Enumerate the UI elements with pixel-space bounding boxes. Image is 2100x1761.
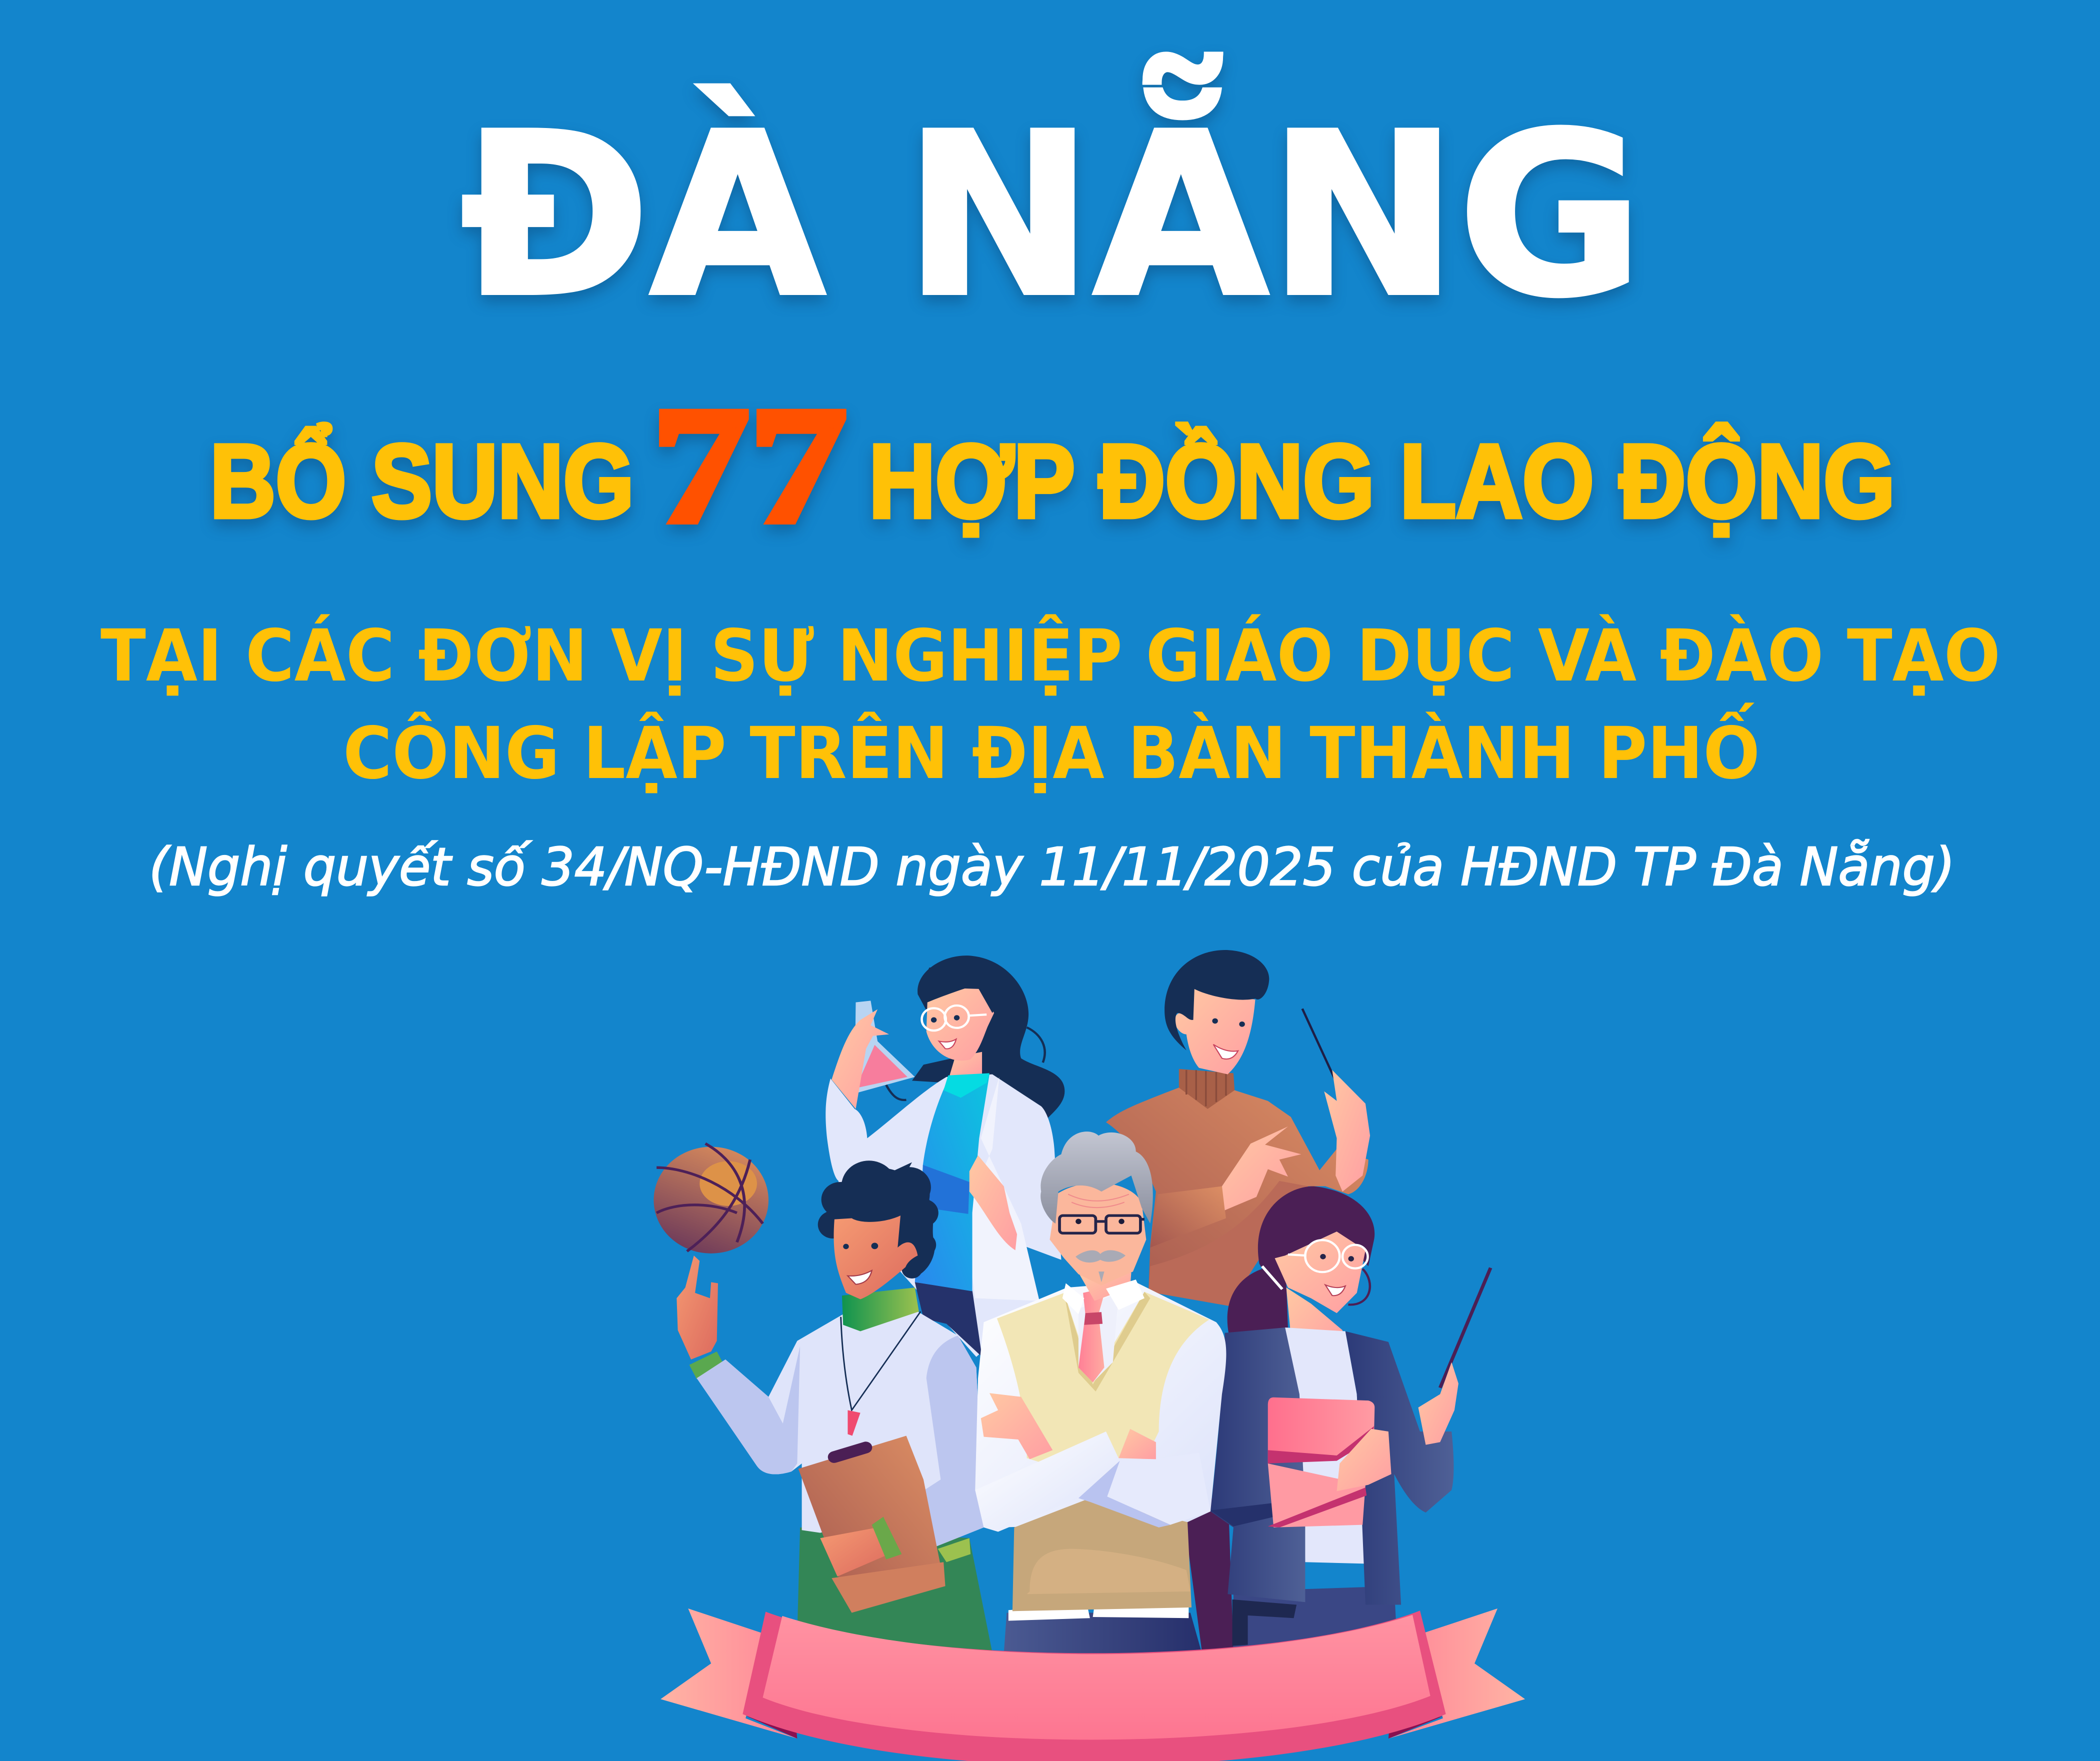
illustration: group of teachers <box>654 950 1525 1761</box>
ribbon right tail <box>1388 1608 1525 1738</box>
resolution reference: (Nghị quyết số 34/NQ-HĐND ngày 11/11/2025 của HĐND TP Đà Nẵng) <box>149 836 1955 898</box>
headline right text: HỢP ĐỒNG LAO ĐỘNG <box>869 424 1895 540</box>
flask <box>854 1000 915 1094</box>
figure: sports teacher with basketball <box>654 1144 992 1652</box>
subtitle line 1: TẠI CÁC ĐƠN VỊ SỰ NGHIỆP GIÁO DỤC VÀ ĐÀO TẠO <box>100 614 2000 698</box>
clipboard <box>798 1436 944 1613</box>
figure: scientist <box>826 956 1064 1357</box>
figure: male teacher with pointer <box>1106 950 1370 1306</box>
subtitle line 2: CÔNG LẬP TRÊN ĐỊA BÀN THÀNH PHỐ <box>343 702 1760 795</box>
crossed arms <box>1107 1429 1210 1525</box>
ribbon body <box>742 1610 1446 1761</box>
folder <box>1268 1464 1366 1528</box>
headline: 77 labour contracts <box>210 373 1895 557</box>
number 77: 77 <box>652 373 847 557</box>
icon: basketball <box>654 1144 768 1254</box>
ribbon left tail <box>660 1608 797 1738</box>
title: ĐÀ NẴNG <box>460 52 1644 346</box>
figure: female teacher with folder <box>1184 1186 1490 1651</box>
figure: senior teacher <box>975 1132 1226 1654</box>
headline left text: BỔ SUNG <box>210 424 634 540</box>
ribbon banner <box>660 1608 1525 1761</box>
